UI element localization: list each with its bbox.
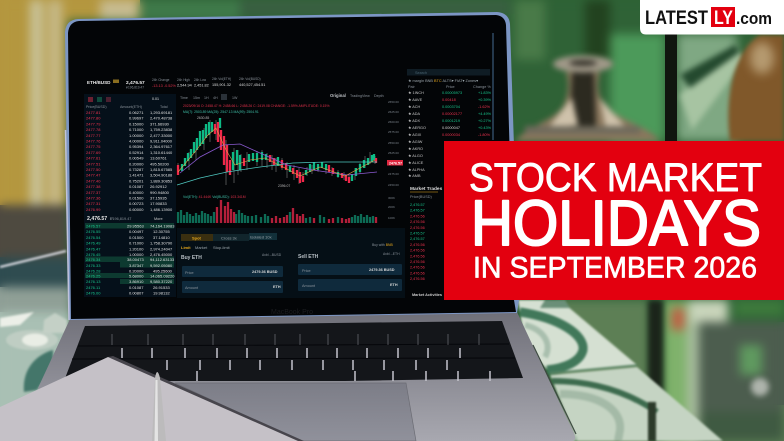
market list panel: +0.43% bbox=[478, 126, 492, 130]
order book buy rows: 2476.13 bbox=[86, 279, 101, 284]
order book sell rows: 4.00000 bbox=[129, 138, 144, 144]
market list panel: ★ AGIW bbox=[408, 140, 423, 144]
market list panel: 0.0000034 bbox=[442, 133, 460, 137]
pen bbox=[152, 372, 166, 441]
laptop model label: MacBook Pro bbox=[271, 309, 313, 316]
laptop lid bbox=[65, 12, 519, 320]
pair header bbox=[87, 77, 265, 90]
order book sell rows: 1,293.69181 bbox=[150, 110, 173, 115]
chart toolbar: 15m bbox=[193, 96, 200, 100]
market list panel: 0.00005973 bbox=[442, 91, 462, 95]
order book buy rows: 29.95563 bbox=[127, 224, 144, 228]
order book sell rows: 2477.80 bbox=[86, 116, 101, 121]
chart toolbar: 1W bbox=[232, 96, 238, 100]
notebook bbox=[0, 356, 304, 441]
order book sell rows: 1.41471 bbox=[129, 173, 144, 178]
market trades panel: 2,476.57 bbox=[410, 209, 425, 213]
order book sell rows: 2,477.33000 bbox=[150, 133, 173, 138]
logo: LatestLY.com: .com bbox=[736, 9, 772, 28]
pair header: 440,527,454.51 bbox=[239, 83, 265, 87]
laptop keyboard bbox=[64, 321, 523, 381]
order book sell rows: 2477.61 bbox=[86, 156, 101, 161]
order book sell rows: 2477.38 bbox=[86, 184, 101, 189]
order book sell rows: 2,470.48738 bbox=[150, 116, 173, 121]
market list panel: 0.0003704 bbox=[442, 105, 460, 109]
order book sell rows: 0.00723 bbox=[129, 201, 144, 206]
market trades panel: 2,476.56 bbox=[410, 277, 425, 281]
order book sell rows: 2477.40 bbox=[86, 178, 101, 183]
order book buy rows: 37.14810 bbox=[153, 235, 170, 240]
market trades panel: Market Activities bbox=[412, 293, 442, 297]
price axis: 2550.00 bbox=[388, 141, 399, 145]
order book buy rows: 94,112.63133 bbox=[150, 257, 175, 262]
indicator labels bbox=[183, 104, 329, 188]
logo: LatestLY.com bbox=[640, 0, 784, 34]
trade form tabs: Spot bbox=[192, 236, 202, 240]
market trades panel: 2,476.56 bbox=[410, 254, 425, 258]
order book sell rows: 1,759.23838 bbox=[150, 127, 173, 132]
order book buy rows: 495.25600 bbox=[153, 269, 173, 274]
order book sell rows: Price(BUSD) bbox=[86, 105, 107, 109]
trading screen bbox=[84, 69, 492, 298]
order book sell rows: 2477.75 bbox=[86, 144, 101, 149]
market list panel: ★ AKRO bbox=[408, 147, 423, 151]
market trades panel: 2,476.56 bbox=[410, 220, 425, 224]
market trades panel: 2,476.57 bbox=[410, 237, 425, 241]
market trades panel: Market Trades bbox=[410, 186, 443, 192]
buy form: 2479.36 BUSD bbox=[252, 270, 278, 274]
market list panel: ★ AGIX bbox=[408, 133, 422, 137]
market list panel: ★ AAVE bbox=[408, 98, 423, 102]
pair header: 24h Low bbox=[194, 78, 207, 82]
order book sell rows: 1,815.67585 bbox=[150, 167, 173, 172]
ceramic vase bbox=[515, 56, 660, 141]
chart toolbar: Time bbox=[180, 96, 188, 100]
order book sell rows: 0.60000 bbox=[129, 207, 144, 212]
order book sell rows: 0.00549 bbox=[129, 156, 144, 161]
order book sell rows: 0.40000 bbox=[129, 190, 144, 195]
order book sell rows: 2477.79 bbox=[86, 121, 101, 126]
current price tag bbox=[387, 160, 403, 166]
chart toolbar bbox=[180, 93, 384, 100]
order book buy rows: 9,592.05080 bbox=[150, 263, 173, 268]
order book sell rows: 37.15935 bbox=[150, 196, 167, 200]
order book sell rows: 0.01500 bbox=[129, 196, 144, 200]
market trades panel: 2,476.56 bbox=[410, 266, 425, 270]
sell form: Sell ETH bbox=[298, 254, 319, 260]
market list panel: 0.00418 bbox=[442, 98, 456, 102]
logo: LatestLY.com: LY bbox=[714, 8, 733, 29]
market trades panel: 2,476.56 bbox=[410, 214, 425, 218]
indicator labels: 2023/09/16 O: 2458.47 H: 2458.66 L: 2458.26 C: 2419.08 CHANGE: -1.59% AMPLITUDE: 0.15% bbox=[183, 104, 329, 108]
order book sell rows: 0.52914 bbox=[129, 150, 144, 155]
order book sell rows: 3,504.90188 bbox=[150, 173, 173, 178]
order book buy rows: 2476.34 bbox=[86, 257, 101, 262]
indicator labels: 2396.07 bbox=[278, 184, 290, 188]
market list panel: ★ ADX bbox=[408, 119, 421, 123]
market trades panel: 2,476.56 bbox=[410, 249, 425, 253]
chart toolbar: Original bbox=[330, 93, 346, 98]
order form background bbox=[177, 228, 405, 298]
indicator labels: MA(7): 2503.89 MA(25): 2547.13 MA(99): 2504.91 bbox=[183, 110, 259, 114]
price axis: 2600.00 bbox=[388, 120, 399, 124]
market trades panel: 2,476.56 bbox=[410, 226, 425, 230]
order book sell rows: 495.50200 bbox=[150, 161, 170, 166]
order book sell rows: 2477.51 bbox=[86, 161, 101, 166]
candle wicks bbox=[178, 120, 375, 185]
order book sell rows: 13.60761 bbox=[150, 156, 167, 161]
market trades panel: 2,476.56 bbox=[410, 271, 425, 275]
order book sell rows: 2,364.97617 bbox=[150, 144, 173, 149]
order book buy rows: 2476.49 bbox=[86, 241, 101, 246]
market list panel: ★ ALICE bbox=[408, 161, 424, 165]
last price: 2,476.57 bbox=[87, 216, 107, 222]
order book buy rows: 2476.54 bbox=[86, 235, 101, 240]
order book sell rows: 1.00000 bbox=[129, 133, 144, 138]
market list panel bbox=[407, 69, 492, 178]
order book sell rows: 0.71000 bbox=[129, 127, 144, 132]
market list panel: Price bbox=[446, 85, 455, 89]
brown pot bbox=[728, 35, 784, 141]
screen edge line bbox=[492, 33, 494, 140]
market list panel: -1.80% bbox=[478, 133, 491, 137]
order book buy rows: 2476.45 bbox=[86, 252, 101, 257]
order book buy rows: 74,164.19083 bbox=[150, 224, 175, 228]
chart toolbar: 4H bbox=[213, 96, 218, 100]
lid bezel bbox=[68, 15, 516, 319]
market list panel: ★ ALGO bbox=[408, 154, 423, 158]
order book buy rows: 38.00473 bbox=[127, 257, 144, 262]
order book sell rows: 2477.78 bbox=[86, 127, 101, 132]
laptop bbox=[38, 12, 576, 441]
market list panel: ★ margin BNB BTC ALTS▾ FIAT▾ Zones▾ bbox=[408, 79, 478, 83]
order book sell rows: 2477.69 bbox=[86, 150, 101, 155]
order book buy rows: 1,758.30790 bbox=[150, 241, 173, 246]
price axis: 2475.00 bbox=[388, 172, 399, 176]
price axis: 2525.00 bbox=[388, 151, 399, 155]
candlestick chart bbox=[177, 104, 377, 188]
order book buy rows: 26.91533 bbox=[153, 285, 170, 290]
pair header: 2,476.57 bbox=[126, 80, 145, 86]
heading: in september 2026: IN SEPTEMBER 2026 bbox=[473, 252, 757, 285]
order book sell rows: 0.75201 bbox=[129, 178, 144, 183]
pair header: 24h Change bbox=[152, 78, 170, 82]
order book sell rows: 1,486.13900 bbox=[150, 207, 173, 212]
trade form tabs bbox=[181, 233, 393, 250]
trade form tabs: Buy with BNB bbox=[372, 243, 393, 247]
buy form: Price bbox=[185, 271, 194, 275]
trade form tabs: Market bbox=[195, 245, 208, 250]
market list panel: ★ ALPHA bbox=[408, 168, 425, 172]
order book sell rows: 1,310.61440 bbox=[150, 150, 173, 155]
pair header: -13.13 -0.52% bbox=[152, 84, 176, 88]
order book sell rows: 2477.77 bbox=[86, 133, 101, 138]
laptop deck edge bbox=[533, 345, 576, 434]
volume bars bbox=[178, 195, 376, 223]
market trades panel: 2,476.57 bbox=[410, 232, 425, 236]
current price tag: 2476.57 bbox=[389, 161, 402, 165]
price axis bbox=[388, 100, 399, 220]
order book buy rows: 0.20000 bbox=[129, 269, 144, 274]
order book sell rows: 1,889.30853 bbox=[150, 178, 173, 183]
price axis: 100K bbox=[388, 216, 395, 220]
pair header: 24h Vol(ETH) bbox=[212, 77, 231, 81]
chart toolbar: TradingView bbox=[350, 94, 370, 98]
market list panel: ★ ACH bbox=[408, 105, 421, 109]
order book sell rows: 2477.50 bbox=[86, 167, 101, 172]
glass table left bbox=[0, 312, 67, 392]
green candles bbox=[182, 118, 374, 181]
banner bbox=[444, 141, 784, 300]
trackpad bbox=[175, 383, 416, 441]
buy form: ETH bbox=[273, 285, 281, 289]
pair header: 155,901.32 bbox=[212, 83, 231, 87]
order book buy rows: 0.71000 bbox=[129, 241, 144, 246]
order book buy rows: 0.01087 bbox=[129, 285, 144, 290]
trade form tabs: Cross 3x bbox=[221, 236, 237, 240]
market trades panel bbox=[410, 186, 443, 297]
order book sell rows: 0.99697 bbox=[129, 116, 144, 121]
order book sell rows: 2477.76 bbox=[86, 138, 101, 144]
order book sell rows bbox=[86, 97, 173, 212]
order book buy rows: 0.01500 bbox=[129, 235, 144, 240]
glass table right bbox=[518, 300, 723, 441]
market list panel: +4.49% bbox=[478, 112, 492, 116]
sell form: ETH bbox=[390, 283, 398, 287]
order book buy rows: 12.30755 bbox=[153, 229, 170, 234]
buy form: Amount bbox=[185, 286, 199, 290]
buy form: Buy ETH bbox=[181, 255, 202, 261]
pair header: 2,451.82 bbox=[194, 84, 209, 88]
market list panel: ★ AMB bbox=[408, 174, 421, 178]
market list panel: 0.0000047 bbox=[442, 126, 460, 130]
pair header: 24h Vol(BUSD) bbox=[239, 77, 261, 81]
indicator labels: 2630.85 bbox=[197, 116, 209, 120]
order book buy rows: 2,974.24047 bbox=[150, 246, 173, 251]
background post bbox=[665, 34, 677, 142]
market list panel: 0.00002177 bbox=[442, 112, 462, 116]
pot highlight bbox=[750, 42, 774, 74]
order book buy rows: 2476.57 bbox=[86, 224, 101, 228]
order book buy rows: 2476.47 bbox=[86, 246, 101, 251]
order book sell rows: Amount(ETH) bbox=[120, 105, 142, 109]
chart toolbar: 1H bbox=[204, 96, 209, 100]
order book buy rows: 2,476.45000 bbox=[150, 252, 173, 257]
market list panel: ★ ADA bbox=[408, 112, 421, 116]
heading: stock market: STOCK MARKET bbox=[469, 156, 762, 200]
order book buy rows: 2476.28 bbox=[86, 269, 101, 274]
trade form tabs: Limit bbox=[181, 245, 191, 250]
order book buy rows: 9,580.37220 bbox=[150, 279, 173, 284]
order book sell rows: 2477.36 bbox=[86, 196, 101, 200]
order book sell rows: 0.95394 bbox=[129, 144, 144, 149]
market list panel: Search bbox=[415, 71, 427, 75]
order book sell rows: 0.20000 bbox=[129, 161, 144, 166]
order book buy rows: 2476.11 bbox=[86, 285, 101, 290]
market trades panel: 2,476.57 bbox=[410, 203, 425, 207]
order book buy rows: 1.20100 bbox=[129, 246, 144, 251]
red candles bbox=[178, 122, 376, 183]
buy form bbox=[181, 253, 283, 293]
pair header: 24h High bbox=[177, 78, 190, 82]
lid lower light edge bbox=[66, 130, 69, 320]
order book sell rows: 2476.99 bbox=[86, 207, 101, 212]
laptop deck bbox=[38, 312, 575, 441]
order book buy rows: 0.00497 bbox=[129, 229, 144, 234]
order book sell rows: 371.66930 bbox=[150, 121, 170, 126]
order book sell rows: 17.90833 bbox=[150, 201, 167, 206]
price axis: 2625.00 bbox=[388, 110, 399, 114]
price axis: 200K bbox=[388, 205, 395, 209]
order book buy rows: 5.68000 bbox=[129, 274, 144, 278]
market list panel: +0.39% bbox=[478, 98, 492, 102]
market list panel: Change % bbox=[473, 85, 491, 89]
order book sell rows: 9,911.04000 bbox=[150, 138, 173, 144]
market list panel: ★ 1INCH bbox=[408, 91, 424, 95]
heading: holidays: HOLIDAYS bbox=[471, 187, 761, 259]
pair header: ₽196,819.47 bbox=[126, 86, 144, 90]
order book buy rows: 1.00000 bbox=[129, 252, 144, 257]
sell form bbox=[298, 252, 402, 291]
sell form: Avbl --ETH bbox=[383, 252, 400, 256]
order book buy rows: 2476.00 bbox=[86, 291, 101, 296]
order book buy rows bbox=[85, 223, 175, 296]
pair header: ETH/BUSD bbox=[87, 80, 111, 85]
market list panel: +0.27% bbox=[478, 119, 492, 123]
trade form tabs: Stop-limit bbox=[213, 245, 231, 250]
order book buy rows: 3.86910 bbox=[129, 279, 144, 284]
market list panel: +1.83% bbox=[478, 91, 492, 95]
order book sell rows: 2477.47 bbox=[86, 173, 101, 178]
moving averages bbox=[177, 162, 377, 185]
last price: More bbox=[154, 217, 163, 221]
order book buy rows: 19.98132 bbox=[153, 291, 170, 296]
market list panel: 0.0001219 bbox=[442, 119, 460, 123]
window sill line bbox=[0, 251, 66, 267]
order book buy rows: 2476.33 bbox=[86, 263, 101, 268]
price axis: 2575.00 bbox=[388, 130, 399, 134]
pair header: 2,544.94 bbox=[177, 84, 192, 88]
price axis: 300K bbox=[388, 196, 395, 200]
background leaves bbox=[648, 45, 769, 400]
order book sell rows: 0.73287 bbox=[129, 167, 144, 172]
order book buy rows: 2476.25 bbox=[86, 274, 101, 278]
order book sell rows: 2477.37 bbox=[86, 190, 101, 195]
order book sell rows: 0.15000 bbox=[129, 121, 144, 126]
order book buy rows: 14,065.09220 bbox=[150, 274, 175, 278]
sell form: Amount bbox=[302, 284, 316, 288]
chart toolbar: Depth bbox=[374, 94, 384, 98]
order book buy rows: 2476.55 bbox=[86, 229, 101, 234]
market list panel: -1.62% bbox=[478, 105, 491, 109]
buy form: Avbl --BUSD bbox=[262, 253, 282, 257]
market trades panel: Price(BUSD) bbox=[410, 195, 432, 199]
order book buy rows: 0.00807 bbox=[129, 291, 144, 296]
price axis: 2450.00 bbox=[388, 183, 399, 187]
order book sell rows: 0.06271 bbox=[129, 110, 144, 115]
last price bbox=[87, 216, 163, 222]
screen panel background bbox=[84, 94, 176, 297]
order book sell rows: 26.92912 bbox=[150, 184, 167, 189]
market trades panel: 2,476.56 bbox=[410, 243, 425, 247]
market trades panel: 2,476.56 bbox=[410, 260, 425, 264]
volume bars: Vol(ETH): 41.444K Vol(BUSD): 103.341M bbox=[183, 195, 246, 199]
order book sell rows: Total bbox=[160, 105, 168, 109]
order book sell rows: 0.01 bbox=[152, 97, 159, 101]
market list panel: ★ AERGO bbox=[408, 126, 426, 130]
trade form tabs: Isolated 10x bbox=[250, 234, 272, 240]
sell form: Price bbox=[302, 269, 311, 273]
logo: LatestLY.com: LATEST bbox=[645, 7, 708, 29]
market list panel: Pair bbox=[408, 85, 415, 89]
order book sell rows: 990.94800 bbox=[150, 190, 170, 195]
last price: ₽196,819.47 bbox=[110, 217, 131, 221]
order book sell rows: 2477.31 bbox=[86, 201, 101, 206]
order book sell rows: 2477.81 bbox=[86, 110, 101, 115]
sell form: 2479.36 BUSD bbox=[369, 268, 395, 272]
price axis: 2650.00 bbox=[388, 100, 399, 104]
order book buy rows: 3.87347 bbox=[129, 263, 144, 268]
order book sell rows: 0.01087 bbox=[129, 184, 144, 189]
